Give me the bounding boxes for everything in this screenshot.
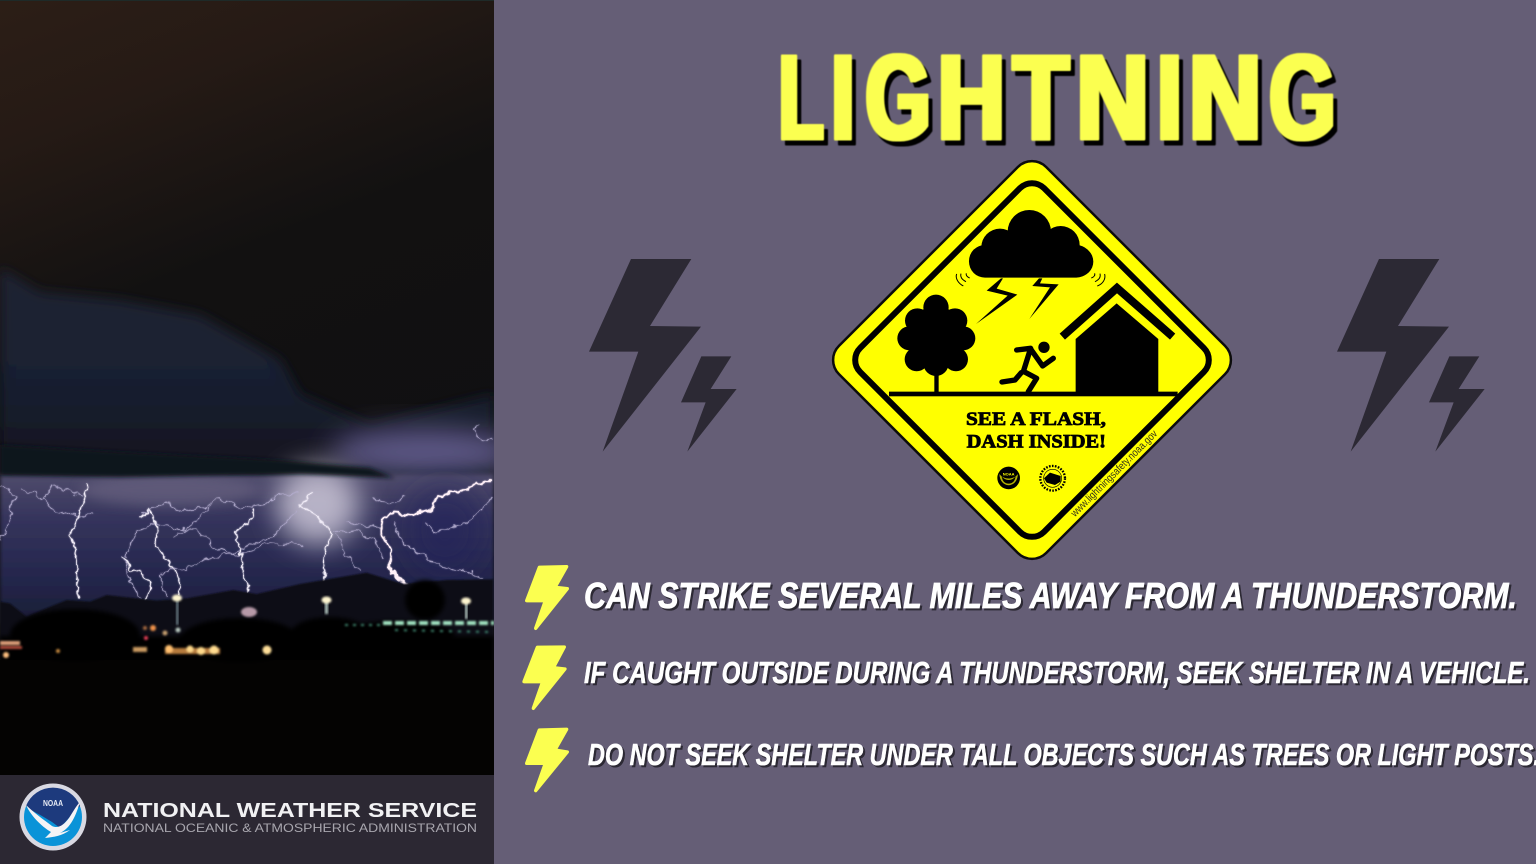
dark right side of band bbox=[408, 480, 482, 538]
sign inner border bbox=[848, 176, 1216, 544]
dark ground bbox=[0, 636, 494, 660]
lit rain shaft bbox=[276, 465, 360, 545]
main bright strike bbox=[382, 482, 493, 586]
sign slogan: SEE A FLASH, bbox=[966, 409, 1106, 430]
warning sign bbox=[825, 153, 1239, 567]
panel: storm photograph bbox=[0, 0, 520, 775]
mountain silhouette bbox=[0, 572, 494, 624]
title: L bbox=[779, 31, 823, 166]
title: I bbox=[1157, 30, 1182, 165]
faint branches bbox=[0, 423, 493, 598]
NOAA logo bbox=[20, 784, 86, 850]
title: N bbox=[1189, 29, 1261, 165]
icon: yellow bullet bolt 2 bbox=[524, 647, 565, 708]
bright strokes bbox=[71, 486, 332, 599]
sign slogan: DASH INSIDE! bbox=[967, 431, 1106, 452]
ground line bbox=[889, 392, 1178, 396]
icon: dark lightning bolts left bbox=[589, 259, 737, 452]
icon: storm cloud bbox=[969, 210, 1093, 278]
sign slogan bbox=[966, 409, 1106, 452]
photo top edge bbox=[0, 0, 494, 1]
title: H bbox=[938, 29, 1005, 165]
dark shelf cloud bbox=[0, 445, 395, 478]
tree silhouettes bbox=[10, 578, 454, 636]
blue cloud mass bbox=[0, 268, 494, 480]
icon: yellow bullet bolt 1 bbox=[527, 567, 567, 628]
icon: house bbox=[1062, 288, 1173, 392]
NOAA wordmark: NOAA bbox=[43, 799, 63, 808]
footer bar bbox=[0, 775, 494, 864]
title: G bbox=[1270, 30, 1335, 166]
title: G bbox=[866, 31, 931, 166]
light posts bbox=[172, 594, 471, 625]
icon: cloud lightning bolts bbox=[976, 278, 1059, 324]
title: N bbox=[1076, 29, 1149, 165]
title: I bbox=[832, 29, 854, 165]
icon: sound waves bbox=[956, 273, 1105, 286]
icon: NOAA seal bbox=[997, 467, 1020, 489]
agency subtitle: NATIONAL OCEANIC & ATMOSPHERIC ADMINISTRATION bbox=[103, 821, 477, 835]
icon: yellow bullet bolt 3 bbox=[527, 729, 567, 791]
town lights bbox=[0, 623, 494, 658]
title: T bbox=[1013, 29, 1069, 165]
title bbox=[779, 29, 1335, 166]
lightning bolts bbox=[0, 423, 493, 599]
icon: running person bbox=[1002, 342, 1053, 392]
icon: NOAA seal: NOAA bbox=[1003, 471, 1015, 476]
storm band bbox=[0, 474, 494, 624]
sign diamond bbox=[825, 153, 1239, 567]
rain haze left bbox=[80, 474, 260, 506]
icon: tree bbox=[897, 295, 975, 393]
icon: NWS seal bbox=[1040, 466, 1065, 491]
dark sky bbox=[0, 1, 494, 660]
agency name: NATIONAL WEATHER SERVICE bbox=[103, 800, 477, 822]
purple cloud haze bbox=[330, 428, 520, 476]
sign website url: www.lightningsafety.noaa.gov bbox=[1068, 428, 1160, 520]
icon: dark lightning bolts right bbox=[1337, 259, 1485, 452]
